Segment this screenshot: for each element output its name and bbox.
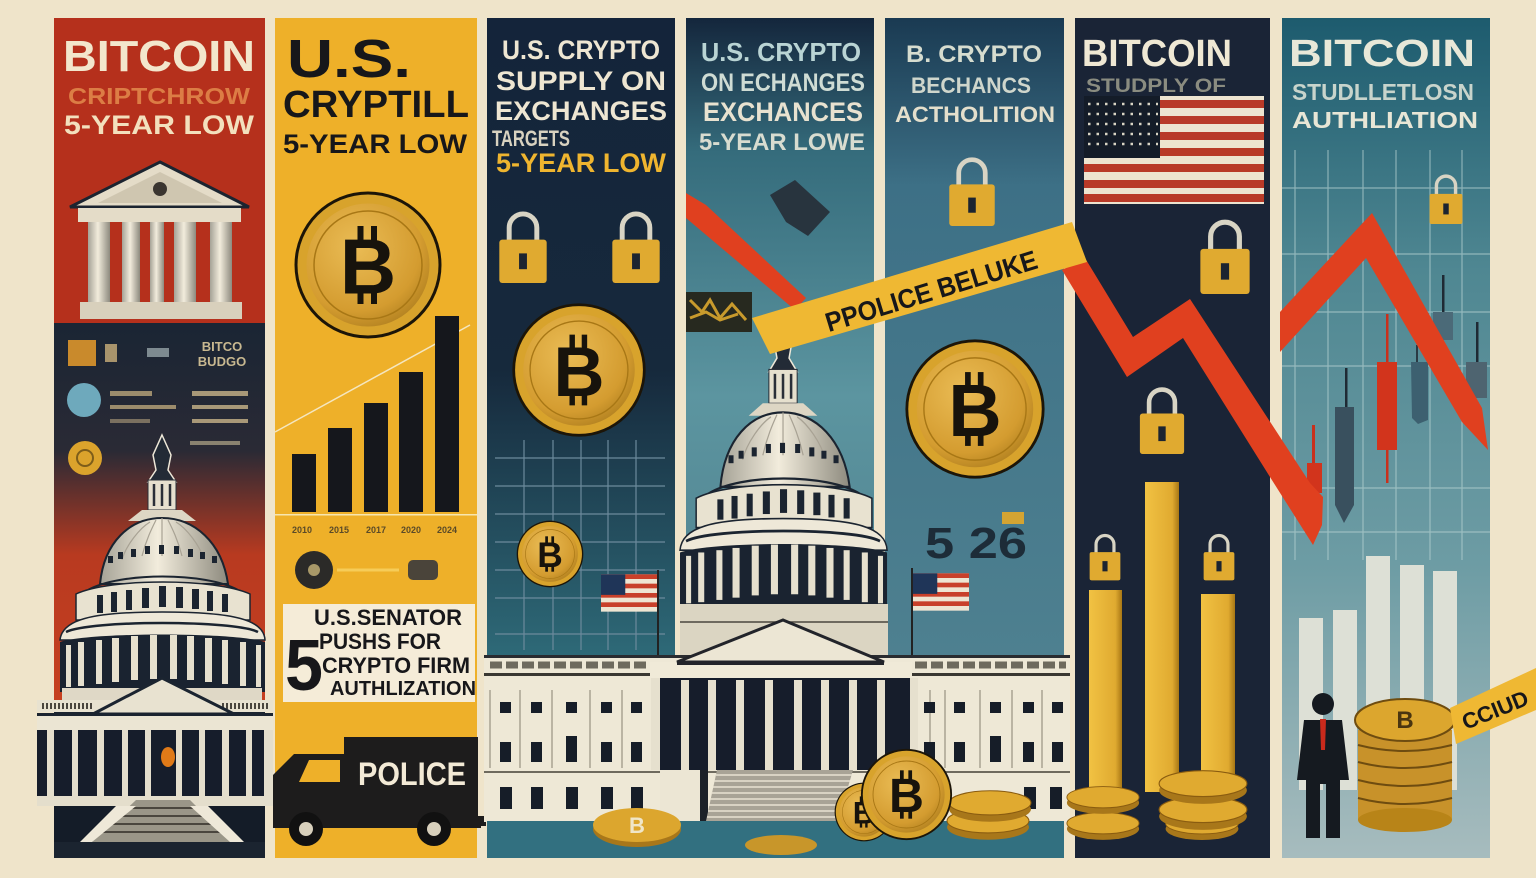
coins on ground: B — [629, 813, 645, 838]
small legend items: BITCO — [202, 339, 242, 354]
chart grid — [1282, 150, 1490, 560]
heading: panel 3: EXCHANGES — [495, 96, 667, 126]
panel 2: yellow U.S. crypto banner — [273, 18, 486, 858]
heading: panel 4: U.S. CRYPTO — [701, 37, 861, 67]
heading: panel 5 — [895, 41, 1055, 127]
bar chart: 2015 — [329, 525, 349, 535]
panel 7: teal to grey market banner — [1280, 18, 1490, 858]
panel 6: navy lock and gold bars — [1075, 18, 1270, 858]
icon: large flag — [1084, 96, 1264, 204]
coins on ground — [593, 749, 1247, 855]
chart grid — [495, 440, 665, 650]
police tape banner — [752, 222, 1087, 354]
heading: panel 5: ACTHOLITION — [895, 102, 1055, 127]
callout: senator headline — [283, 604, 476, 706]
heading: panel 4: 5-YEAR LOWE — [699, 129, 865, 156]
heading: panel 4: EXCHANCES — [703, 97, 863, 127]
icon: padlock — [949, 160, 995, 226]
icon: large bitcoin — [905, 339, 1045, 479]
icon: flag — [601, 570, 659, 655]
icon: police van: POLICE — [358, 756, 466, 792]
chart: gold bars — [1089, 482, 1235, 794]
heading: panel 7: AUTHLIATION — [1292, 107, 1478, 133]
coin stack: B — [1396, 707, 1414, 734]
heading: panel 7: BITCOIN — [1289, 33, 1475, 75]
heading: panel 2: CRYPTILL — [283, 84, 469, 126]
icon: bank building — [70, 162, 249, 319]
capitol building: panel 1 — [37, 435, 273, 842]
torn mark — [686, 292, 752, 332]
callout: senator headline: 5 — [285, 626, 323, 706]
callout: senator headline: CRYPTO FIRM — [322, 653, 470, 678]
heading: panel 1: CRIPTCHROW — [68, 83, 250, 109]
icon: small bitcoin — [517, 521, 583, 587]
bar chart: 2010 — [292, 525, 312, 535]
caution tape — [1450, 668, 1536, 744]
wings — [484, 655, 1070, 822]
coin stack — [1355, 699, 1455, 832]
bar chart — [275, 316, 477, 535]
heading: panel 2 — [283, 29, 469, 159]
icon: padlocks — [1090, 222, 1250, 580]
small legend items: BUDGO — [198, 354, 246, 369]
large capitol: panels 3 to 5 — [484, 319, 1070, 858]
heading: panel 2: 5-YEAR LOW — [283, 129, 468, 159]
ground — [487, 821, 1064, 858]
bar chart: pale bars — [1299, 556, 1457, 790]
icon: businessman — [1297, 693, 1349, 838]
heading: panel 7 — [1289, 33, 1478, 133]
icon: torn emblem — [770, 180, 830, 236]
heading: panel 3: 5-YEAR LOW — [496, 148, 667, 178]
heading: panel 6 — [1082, 33, 1232, 97]
heading: panel 3: U.S. CRYPTO — [502, 35, 660, 65]
heading: panel 4: ON ECHANGES — [701, 69, 865, 97]
heading: panel 5: BECHANCS — [911, 73, 1031, 98]
panel 3: navy supply banner — [487, 18, 675, 858]
police tape banner: PPOLICE BELUKE — [822, 245, 1041, 338]
heading: panel 1 — [63, 32, 255, 140]
icon: flag — [911, 568, 969, 658]
heading: panel 1: BITCOIN — [63, 32, 255, 81]
small legend items — [67, 339, 248, 475]
caution tape: CCIUD — [1458, 685, 1532, 735]
heading: panel 3 — [492, 35, 667, 178]
callout: senator headline: AUTHLIZATION — [330, 678, 476, 700]
heading: panel 2: U.S. — [287, 29, 411, 89]
callout: senator headline: U.S.SENATOR — [314, 605, 462, 630]
portico — [650, 620, 918, 822]
icon: small dark tokens — [295, 551, 438, 589]
heading: panel 7: STUDLLETLOSN — [1292, 79, 1474, 105]
bar chart: 2017 — [366, 525, 386, 535]
icon: police van — [273, 737, 486, 846]
heading: panel 5: B. CRYPTO — [906, 41, 1042, 68]
stairs — [706, 770, 853, 821]
candlestick chart — [1307, 275, 1487, 523]
panel 5: blue banner — [885, 18, 1064, 858]
bar chart: 2024 — [437, 525, 457, 535]
heading: panel 4 — [699, 37, 865, 156]
heading: panel 6: BITCOIN — [1082, 33, 1232, 75]
callout: senator headline: PUSHS FOR — [319, 629, 441, 654]
number label: 5 26 — [925, 519, 1027, 568]
heading: panel 3: TARGETS — [492, 126, 570, 151]
heading: panel 3: SUPPLY ON — [496, 66, 666, 96]
icon: padlock — [1430, 176, 1462, 224]
panel 4: teal banner — [686, 18, 874, 858]
red arrow — [1280, 213, 1488, 450]
red falling arrow: panels 4 to 6 — [686, 193, 1323, 545]
panel 1: red Bitcoin banner — [37, 18, 273, 858]
dome — [680, 319, 887, 609]
heading: panel 1: 5-YEAR LOW — [64, 110, 255, 140]
icon: large bitcoin — [294, 192, 442, 338]
icon: large bitcoin — [512, 303, 646, 437]
bar chart: 2020 — [401, 525, 421, 535]
heading: panel 6: STUDPLY OF — [1086, 76, 1226, 97]
icon: padlocks — [499, 214, 660, 283]
